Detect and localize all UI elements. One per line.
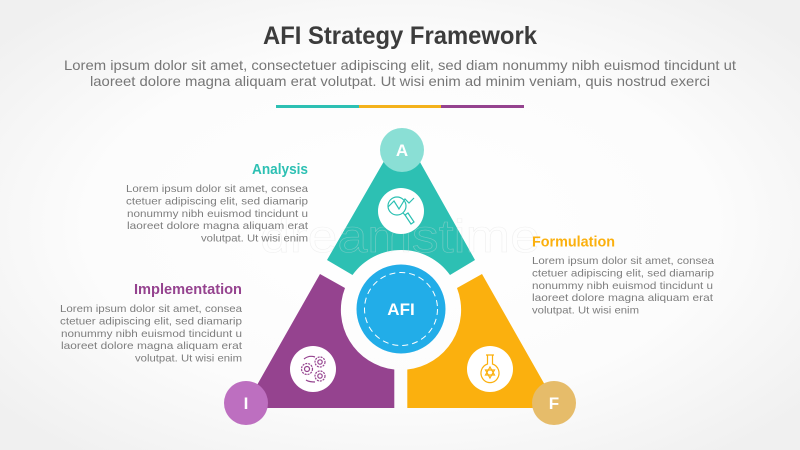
segment: formulation: [407, 274, 558, 408]
subtitle text: Lorem ipsum dolor sit amet, consectetuer adipiscing elit, sed diam nonummy nibh euismod tincidunt ut: [64, 57, 736, 73]
block: implementation: volutpat. Ut wisi enim: [135, 352, 242, 364]
block: implementation: [60, 281, 242, 364]
badge: A: A: [396, 141, 408, 160]
block: analysis: Analysis: [252, 161, 308, 178]
tri-colour divider: [276, 105, 524, 108]
block: implementation: nonummy nibh euismod tincidunt u: [61, 328, 242, 340]
icon: flask: [467, 346, 513, 392]
block: analysis: volutpat. Ut wisi enim: [201, 232, 308, 244]
centre circle: AFI: AFI: [387, 300, 415, 319]
subtitle text: laoreet dolore magna aliquam erat volutpat. Ut wisi enim ad minim veniam, quis nostrud exerci: [90, 73, 710, 89]
block: implementation: Implementation: [134, 281, 242, 298]
subtitle text: [64, 57, 736, 89]
segment: analysis: [327, 130, 475, 275]
block: analysis: [126, 161, 308, 244]
centre circle: AFI: [356, 264, 446, 354]
block: analysis: ctetuer adipiscing elit, sed diamarip: [126, 196, 308, 208]
block: implementation: Lorem ipsum dolor sit amet, consea: [60, 303, 242, 315]
block: implementation: ctetuer adipiscing elit, sed diamarip: [60, 316, 242, 328]
block: formulation: laoreet dolore magna aliquam erat: [532, 292, 713, 304]
block: formulation: ctetuer adipiscing elit, sed diamarip: [532, 268, 714, 280]
block: formulation: nonummy nibh euismod tincidunt u: [532, 280, 713, 292]
block: formulation: Lorem ipsum dolor sit amet, consea: [532, 255, 714, 267]
block: implementation: laoreet dolore magna aliquam erat: [61, 340, 242, 352]
title: AFI Strategy Framework: [263, 22, 537, 50]
badge: I: I: [244, 394, 248, 413]
block: formulation: volutpat. Ut wisi enim: [532, 304, 639, 316]
icon: magnifier over chart: [378, 188, 424, 234]
block: formulation: [532, 234, 714, 316]
block: analysis: Lorem ipsum dolor sit amet, consea: [126, 183, 308, 195]
badge: A: [380, 128, 424, 172]
block: analysis: nonummy nibh euismod tincidunt u: [127, 208, 308, 220]
segment: implementation: [244, 274, 394, 408]
block: formulation: Formulation: [532, 234, 615, 250]
watermark: dreamstime: [260, 210, 540, 262]
badge: I: [224, 381, 268, 425]
badge: F: [532, 381, 576, 425]
block: analysis: laoreet dolore magna aliquam erat: [127, 220, 308, 232]
badge: F: F: [549, 394, 559, 413]
icon: gears: [290, 346, 336, 392]
